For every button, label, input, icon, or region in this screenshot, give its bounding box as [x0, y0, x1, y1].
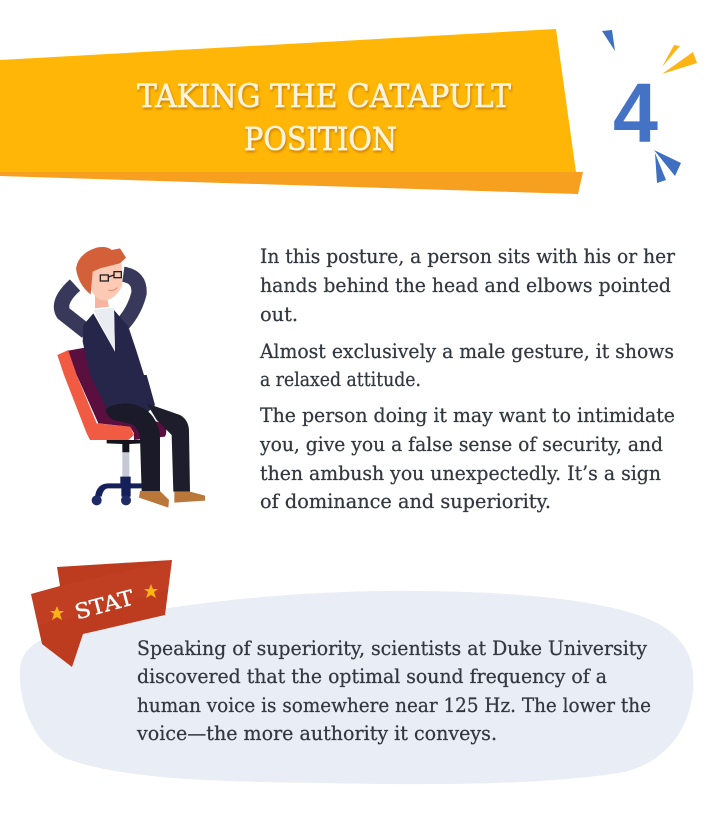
description text: [259, 245, 676, 513]
description text: a relaxed attitude.: [260, 368, 421, 391]
description text: In this posture, a person sits with his or her: [260, 245, 676, 268]
description text: The person doing it may want to intimidate: [260, 404, 675, 427]
description text: out.: [260, 303, 298, 326]
stat text: discovered that the optimal sound frequency of a: [137, 665, 607, 688]
title banner: [0, 29, 583, 194]
number 4 with sparks: [602, 30, 697, 183]
lower half of figure and chair: [64, 375, 205, 508]
stat text: [136, 637, 651, 745]
stat text: human voice is somewhere near 125 Hz. The lower the: [137, 694, 651, 717]
illustration: man reclining in office chair: [57, 247, 205, 508]
description text: Almost exclusively a male gesture, it shows: [259, 340, 674, 363]
description text: you, give you a false sense of security, and: [259, 433, 663, 456]
stat ribbon: [31, 560, 172, 667]
upper half of figure: [57, 247, 144, 375]
number 4 with sparks: 4: [613, 66, 658, 160]
stars: [50, 584, 158, 620]
description text: of dominance and superiority.: [260, 490, 551, 513]
description text: then ambush you unexpectedly. It’s a sign: [260, 462, 661, 485]
stat panel background: [20, 591, 693, 784]
title: POSITION: [244, 120, 397, 158]
ribbon label: STAT: [72, 586, 136, 624]
stat text: voice—the more authority it conveys.: [136, 722, 497, 745]
stat text: Speaking of superiority, scientists at Duke University: [137, 637, 647, 660]
description text: hands behind the head and elbows pointed: [260, 274, 671, 297]
title: TAKING THE CATAPULT: [137, 77, 512, 115]
title: [137, 77, 512, 158]
